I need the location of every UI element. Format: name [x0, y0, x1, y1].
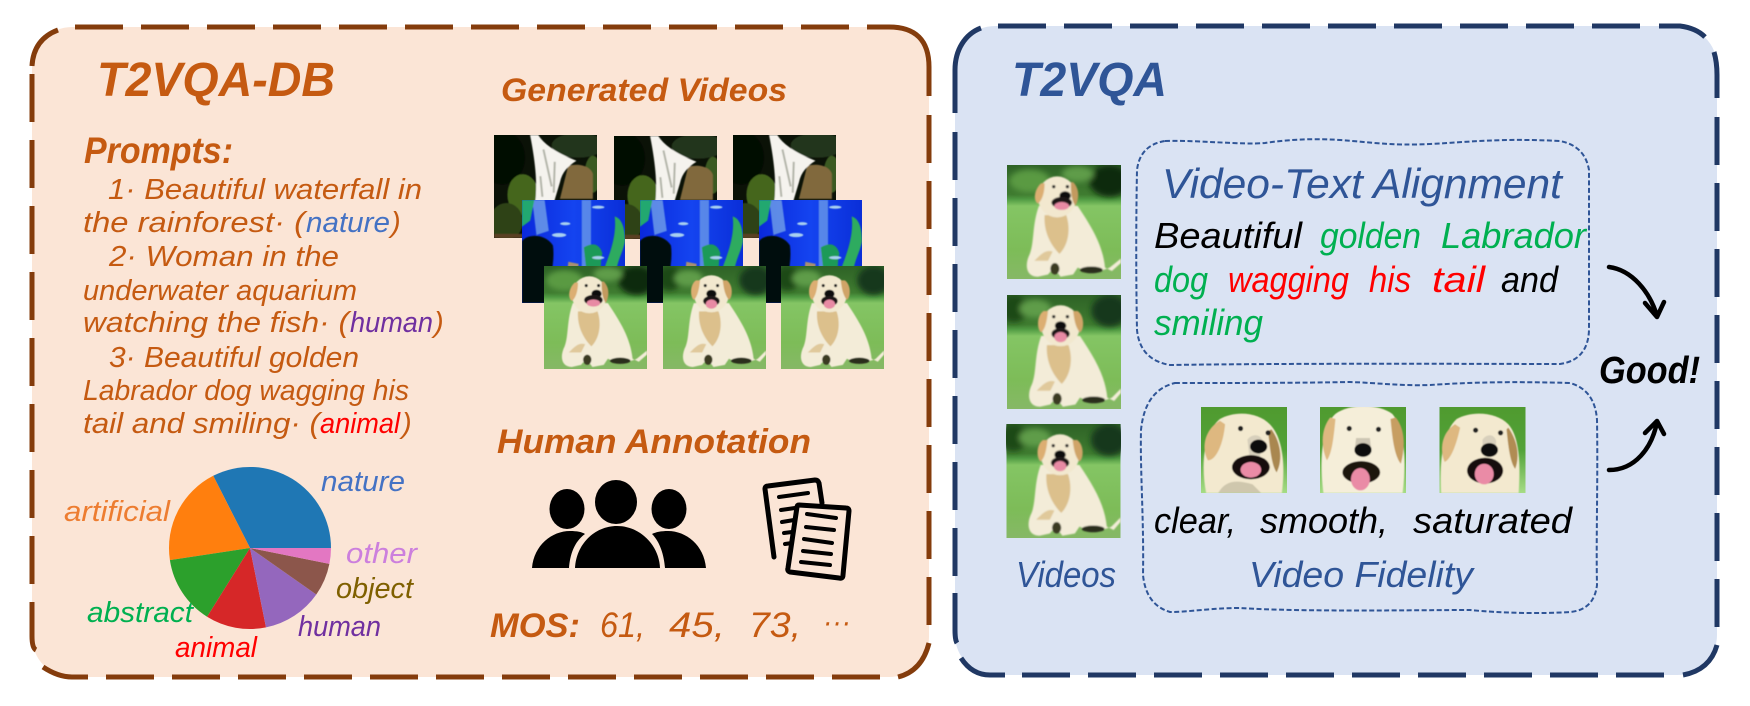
- text block: prompt list: [83, 174, 444, 440]
- text block: highlighted prompt: and: [1501, 259, 1559, 300]
- text block: highlighted prompt: Labrador: [1441, 215, 1588, 256]
- text block: highlighted prompt: dog: [1154, 259, 1208, 300]
- text: fidelity attributes: clear,: [1154, 500, 1236, 541]
- text block: highlighted prompt: wagging: [1228, 259, 1349, 300]
- panel dashed border: [955, 26, 1717, 675]
- text block: highlighted prompt: golden: [1320, 215, 1421, 256]
- heading: generated videos: Generated Videos: [501, 72, 787, 108]
- box: video-text alignment: [1136, 139, 1589, 365]
- text: MOS scores: 73,: [749, 606, 801, 645]
- pie chart labels: artificial: [64, 496, 172, 528]
- label: videos: Videos: [1016, 554, 1116, 595]
- text block: highlighted prompt: his: [1369, 259, 1411, 300]
- text: MOS scores: MOS:: [490, 607, 580, 645]
- text: fidelity attributes: saturated: [1413, 500, 1573, 541]
- text block: prompt list: ): [431, 307, 444, 339]
- label: video fidelity: Video Fidelity: [1249, 554, 1475, 595]
- heading: human annotation: Human Annotation: [497, 423, 811, 461]
- arrow: fidelity to verdict: [1609, 421, 1664, 470]
- pie chart labels: other: [346, 538, 418, 570]
- text block: prompt list: underwater aquarium: [83, 275, 357, 307]
- panel background: [955, 26, 1717, 675]
- icon: documents: [765, 480, 849, 578]
- box: video fidelity: [1141, 382, 1597, 613]
- video frames: dog: [544, 266, 890, 369]
- text block: prompt list: ): [399, 408, 412, 440]
- text block: prompt list: animal: [320, 408, 401, 440]
- video frames: waterfall: [480, 131, 844, 241]
- text block: prompt list: nature: [306, 207, 390, 239]
- panel: T2VQA-DB: [32, 27, 929, 677]
- panel background: [32, 27, 929, 677]
- pie chart labels: human: [298, 611, 381, 643]
- text block: highlighted prompt: Beautiful: [1154, 215, 1303, 256]
- panel: T2VQA: [955, 26, 1717, 675]
- pie chart labels: [64, 466, 418, 664]
- close-up frames: [1201, 406, 1526, 493]
- text block: highlighted prompt: [1154, 215, 1588, 343]
- video frames column: [1000, 165, 1130, 538]
- text: fidelity attributes: [1154, 500, 1573, 541]
- pie chart labels: animal: [175, 632, 258, 664]
- text: MOS scores: 61,: [600, 606, 645, 645]
- text block: prompt list: human: [350, 307, 433, 339]
- arrow: alignment to verdict: [1609, 267, 1664, 317]
- text block: prompt list: watching the fish· (: [83, 307, 353, 339]
- text block: prompt list: 3· Beautiful golden: [109, 342, 359, 374]
- pie chart labels: nature: [321, 466, 405, 498]
- text block: highlighted prompt: smiling: [1154, 302, 1263, 343]
- text block: prompt list: 2· Woman in the: [108, 241, 339, 273]
- title: T2VQA: T2VQA: [1012, 54, 1167, 107]
- icon: group of people: [532, 480, 706, 568]
- heading: prompts: Prompts:: [84, 130, 233, 171]
- pie chart labels: abstract: [87, 597, 195, 629]
- text: MOS scores: 45,: [669, 606, 725, 645]
- text block: prompt list: 1· Beautiful waterfall in: [108, 174, 422, 206]
- text block: prompt list: the rainforest· (: [83, 207, 309, 239]
- text block: prompt list: Labrador dog wagging his: [83, 375, 409, 407]
- pie chart labels: object: [336, 573, 415, 605]
- text: fidelity attributes: smooth,: [1260, 500, 1388, 541]
- text block: prompt list: tail and smiling· (: [83, 408, 324, 440]
- pie chart: prompt categories: [169, 467, 331, 629]
- text: MOS scores: ···: [823, 606, 851, 639]
- verdict: good: Good!: [1599, 350, 1700, 392]
- text: MOS scores: [490, 606, 851, 645]
- heading: video-text alignment: Video-Text Alignment: [1162, 160, 1564, 207]
- text block: prompt list: ): [388, 207, 401, 239]
- panel dashed border: [32, 27, 929, 677]
- video frames: aquarium: [522, 200, 862, 303]
- title: T2VQA-DB: T2VQA-DB: [97, 54, 335, 107]
- text block: highlighted prompt: tail: [1432, 259, 1486, 300]
